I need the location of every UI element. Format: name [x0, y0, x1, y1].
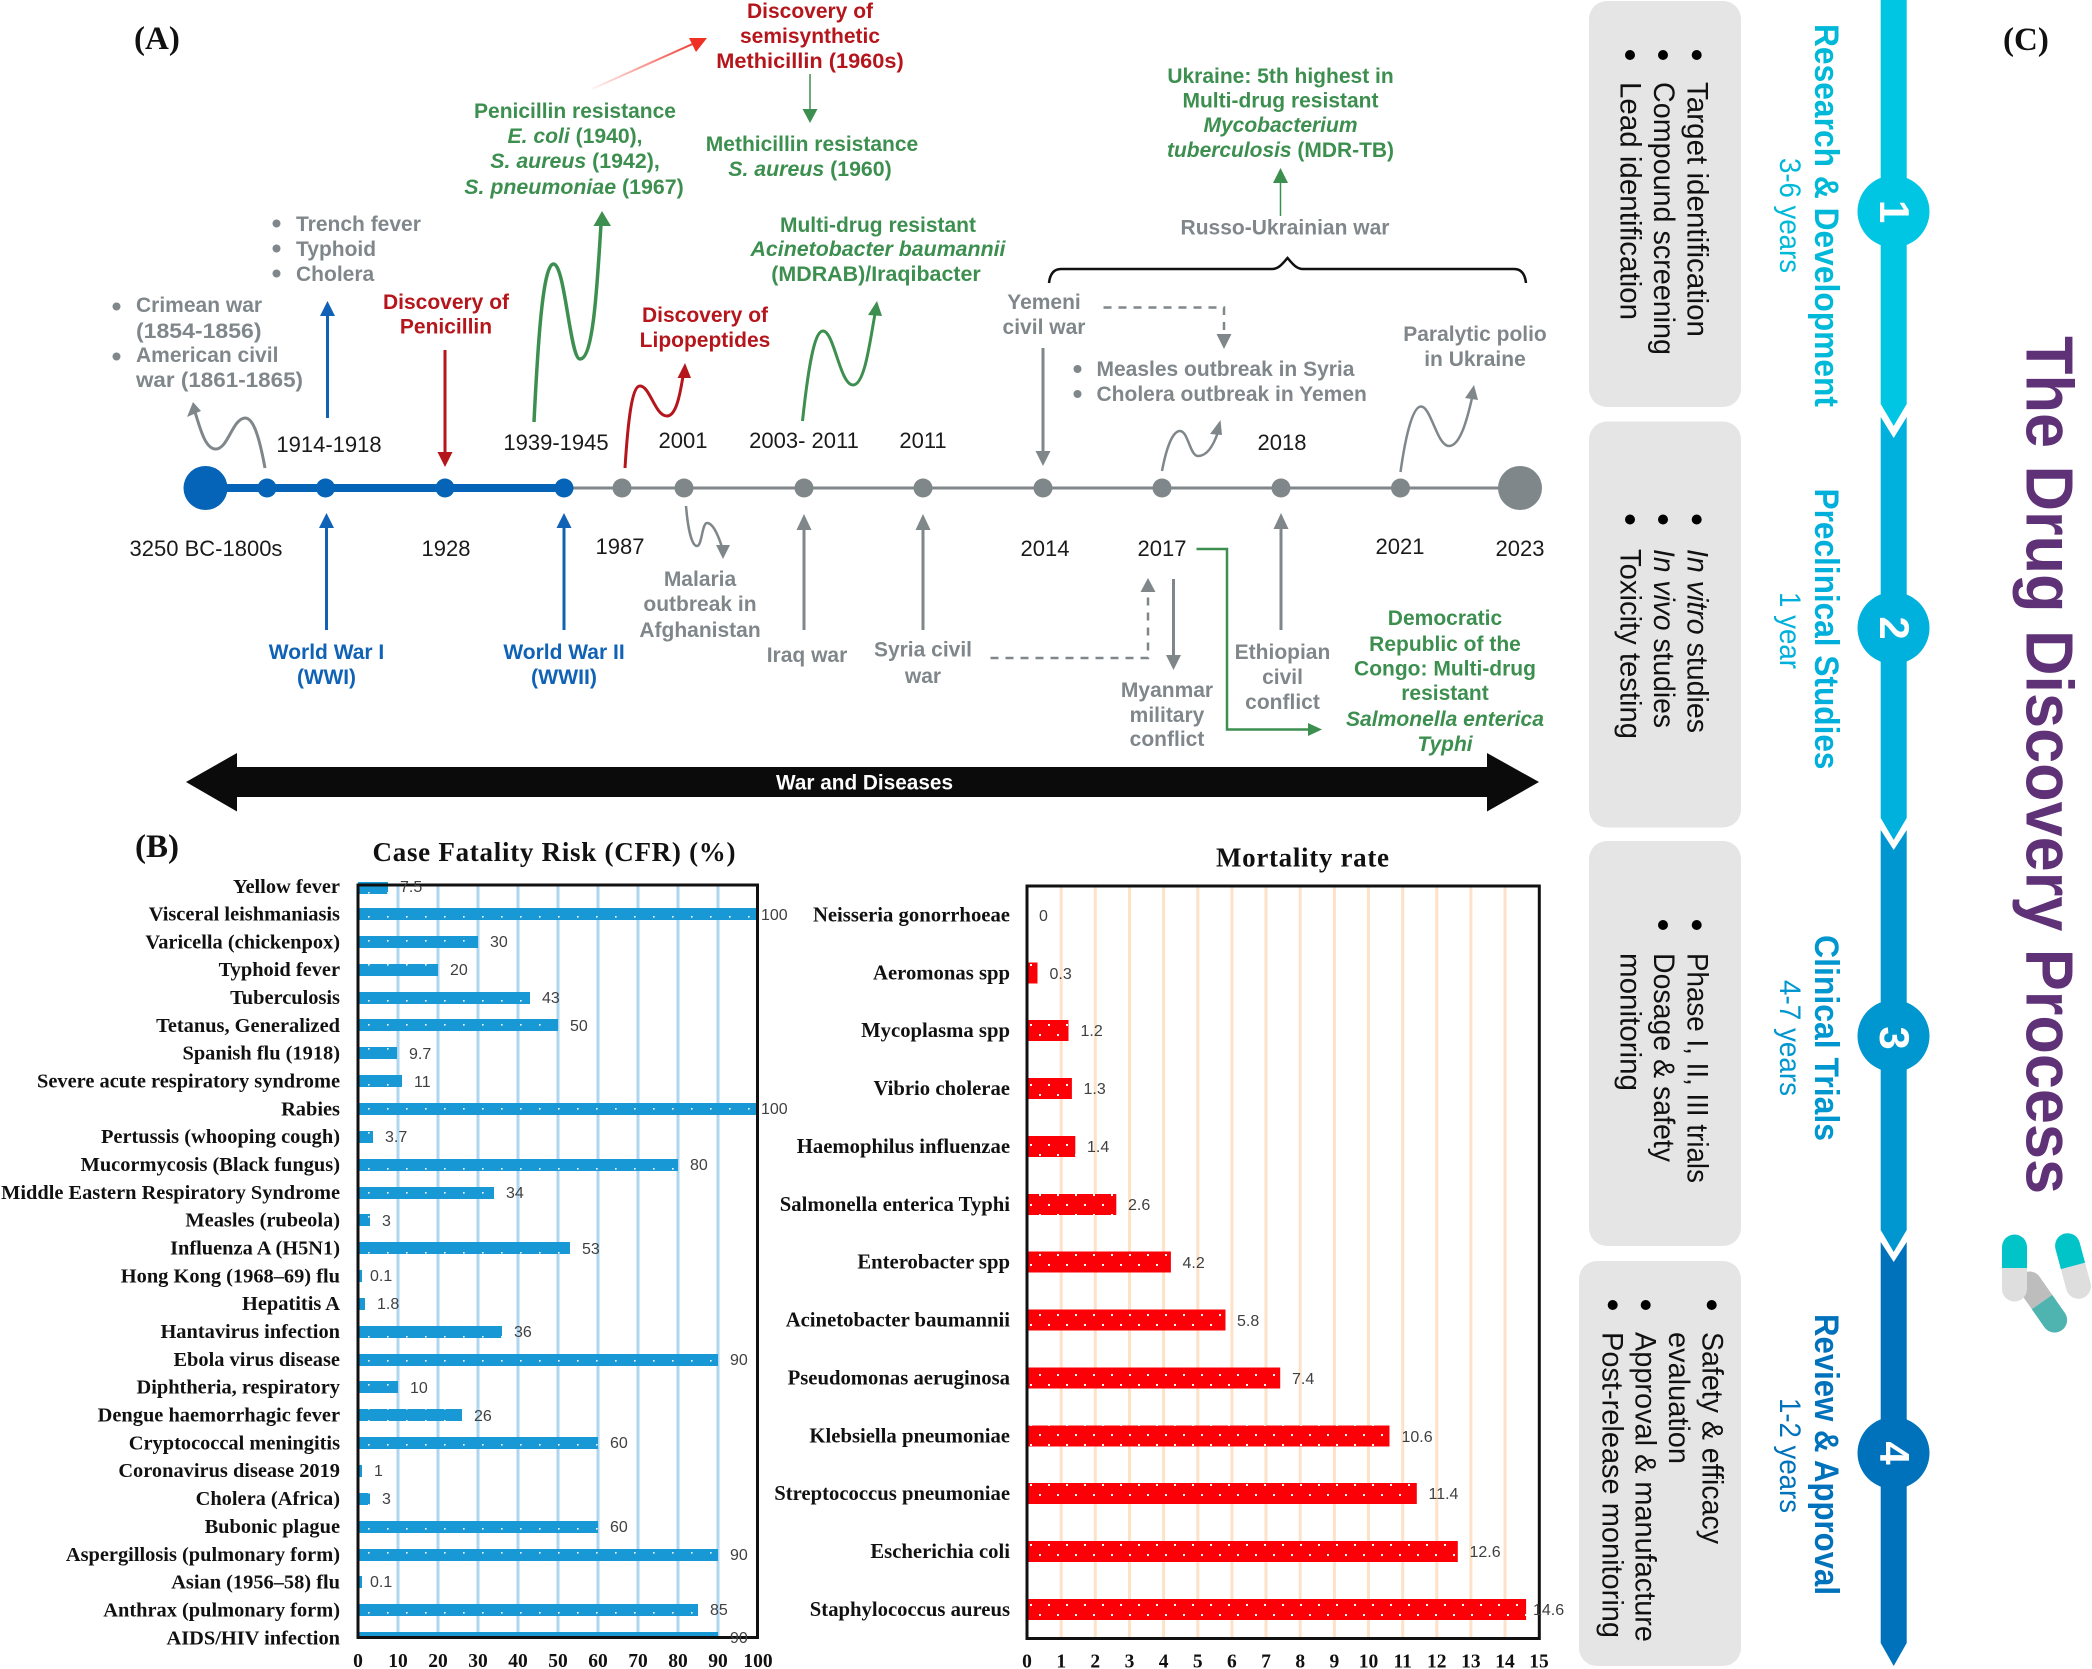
panel A: war and diseases timeline — [112, 0, 1547, 812]
MDRAB text: Multi-drug resistant — [780, 214, 976, 237]
Myanmar military conflict: Myanmar — [1121, 679, 1213, 702]
Measles and cholera outbreak text: Measles outbreak in Syria — [1096, 358, 1355, 381]
bar chart: Case Fatality Risk: Ebola virus disease — [173, 1349, 340, 1371]
Syria civil war: Syria civil — [874, 638, 972, 661]
card: step 3 activities: monitoring — [1614, 953, 1646, 1091]
card: step 3 activities — [1589, 841, 1741, 1246]
bar chart: Case Fatality Risk: Diphtheria, respiratory — [136, 1376, 340, 1398]
Yemeni civil war: Yemeni — [1007, 291, 1081, 314]
Discovery of semisynthetic Methicillin — [716, 0, 904, 73]
arrow: down from Yemeni war — [1036, 348, 1050, 466]
bar chart: Case Fatality Risk: 100 — [761, 907, 788, 924]
step 2 heading — [1773, 488, 1845, 770]
Myanmar military conflict: conflict — [1130, 728, 1204, 751]
bar chart: Mortality rate: Haemophilus influenzae — [797, 1136, 1010, 1158]
bar chart: Case Fatality Risk: Influenza A (H5N1) — [170, 1238, 340, 1260]
step 3 heading: Clinical Trials — [1807, 935, 1845, 1141]
Yemeni civil war: civil war — [1003, 316, 1085, 339]
World War I — [269, 641, 384, 689]
bar chart: Case Fatality Risk: 80 — [690, 1157, 708, 1174]
timeline years: 2003- 2011 — [749, 428, 859, 453]
step 4 heading: Review & Approval — [1807, 1314, 1845, 1595]
arrow: up from Syria civil war — [916, 514, 930, 630]
timeline years: 2017 — [1138, 536, 1186, 561]
Ukraine MDR-TB text: Mycobacterium — [1203, 114, 1358, 137]
bar chart: Case Fatality Risk: 9.7 — [409, 1046, 431, 1063]
bar chart: Mortality rate — [774, 842, 1564, 1669]
bar chart: Case Fatality Risk: Varicella (chickenpox) — [145, 932, 340, 954]
step 4 spine and badge — [1858, 1242, 1930, 1666]
timeline years: 2018 — [1258, 430, 1306, 455]
arrow: up from Iraq war — [796, 514, 812, 630]
arrow: up from WWI — [319, 513, 334, 630]
timeline years: 2021 — [1376, 534, 1424, 559]
Crimean and American civil war text: war (1861-1865) — [135, 369, 303, 392]
dashed arrow: Syria to Myanmar year — [990, 578, 1156, 658]
arrow: up to WWI diseases — [320, 301, 335, 418]
timeline years: 1914-1918 — [276, 432, 382, 457]
bar chart: Case Fatality Risk: Tuberculosis — [230, 987, 340, 1009]
Penicillin resistance text: Penicillin resistance — [474, 100, 676, 123]
bar chart: Case Fatality Risk: Bubonic plague — [205, 1516, 340, 1538]
bar chart: Mortality rate: 14.6 — [1533, 1602, 1564, 1619]
arrow: wavy to outbreaks — [1162, 420, 1222, 471]
bar chart: Case Fatality Risk: Typhoid fever — [219, 959, 340, 981]
card: step 4 activities: evaluation — [1662, 1332, 1695, 1464]
DRC Salmonella text: resistant — [1401, 682, 1489, 705]
bar chart: Case Fatality Risk: Visceral leishmaniasis — [149, 904, 340, 926]
bar chart: Case Fatality Risk: 3.7 — [385, 1129, 407, 1146]
arrow: wavy to malaria — [686, 506, 730, 559]
bar chart: Case Fatality Risk: 43 — [542, 990, 560, 1007]
Paralytic polio in Ukraine: in Ukraine — [1424, 348, 1526, 371]
bar chart: Mortality rate: 10.6 — [1402, 1429, 1433, 1446]
bar chart: Case Fatality Risk: 50 — [570, 1018, 588, 1035]
bar chart: Case Fatality Risk: 90 — [730, 1352, 748, 1369]
bar chart: Mortality rate: 7.4 — [1292, 1371, 1314, 1388]
DRC Salmonella text: Democratic — [1388, 607, 1503, 630]
Crimean and American civil war text — [112, 294, 303, 392]
bar chart: Case Fatality Risk: 85 — [710, 1602, 728, 1619]
Ethiopian civil conflict: Ethiopian — [1235, 641, 1330, 664]
Penicillin resistance text: S. pneumoniae (1967) — [464, 176, 684, 199]
Malaria outbreak: Afghanistan — [639, 619, 761, 642]
bar chart: Case Fatality Risk: 10 — [410, 1380, 428, 1397]
arrow: wavy to penicillin resistance — [534, 211, 611, 422]
banner: double arrow War and Diseases: War and Diseases — [776, 770, 953, 794]
timeline years: 2011 — [899, 428, 947, 453]
timeline axis — [184, 466, 1542, 510]
bar chart: Mortality rate: 2.6 — [1128, 1197, 1150, 1214]
icon: pills — [2002, 1230, 2092, 1337]
card: step 3 activities: Phase I, II, III trials — [1680, 953, 1714, 1183]
Methicillin resistance text: S. aureus (1960) — [728, 158, 892, 181]
chart title: CFR: Case Fatality Risk (CFR) (%) — [372, 837, 736, 867]
step 2 spine and badge: 2 — [1871, 616, 1918, 640]
World War I: World War I — [269, 641, 384, 664]
bar chart: Case Fatality Risk: 1.8 — [377, 1296, 399, 1313]
bar chart: Case Fatality Risk: Rabies — [281, 1098, 340, 1120]
bar chart: Mortality rate: 1.3 — [1084, 1081, 1106, 1098]
bar chart: Case Fatality Risk: Tetanus, Generalized — [156, 1015, 341, 1037]
bar chart: Case Fatality Risk: Coronavirus disease 2019 — [118, 1460, 340, 1482]
arrow: up from WWII — [556, 513, 572, 630]
step 4 heading: 1-2 years — [1773, 1398, 1806, 1513]
bar chart: Case Fatality Risk: 1 — [374, 1463, 383, 1480]
MDRAB text: (MDRAB)/Iraqibacter — [771, 263, 981, 286]
Discovery of Penicillin: Penicillin — [400, 315, 492, 338]
timeline years: 1939-1945 — [503, 430, 609, 455]
bar chart: Case Fatality Risk — [1, 837, 788, 1669]
step 3 heading: 4-7 years — [1773, 980, 1806, 1096]
step 1 heading: 3-6 years — [1773, 158, 1806, 273]
arrow: wavy to lipopeptides — [625, 363, 691, 468]
DRC Salmonella text: Republic of the — [1369, 633, 1521, 656]
Methicillin resistance text — [706, 133, 918, 181]
arrow: faded red to semisynthetic methicillin — [592, 38, 707, 89]
Discovery of Lipopeptides: Discovery of — [642, 304, 768, 327]
bar chart: Case Fatality Risk: Asian (1956–58) flu — [171, 1572, 340, 1594]
bar chart: Case Fatality Risk: Measles (rubeola) — [185, 1210, 340, 1232]
elbow arrow to Salmonella Typhi — [1196, 549, 1322, 736]
Russo-Ukrainian war brace — [1049, 258, 1526, 283]
bar chart: Case Fatality Risk: 3 — [382, 1213, 391, 1230]
bar chart: Case Fatality Risk: 100 — [761, 1101, 788, 1118]
panel label A: (A) — [134, 21, 180, 57]
bar chart: Mortality rate: Staphylococcus aureus — [810, 1599, 1010, 1621]
card: step 4 activities: Post-release monitoring — [1596, 1332, 1628, 1638]
panel label B: (B) — [135, 829, 179, 865]
timeline years: 1928 — [422, 536, 470, 561]
card: step 1 activities: Compound screening — [1647, 82, 1680, 355]
Discovery of semisynthetic Methicillin: Discovery of — [747, 0, 874, 23]
banner: double arrow War and Diseases — [186, 753, 1539, 812]
Measles and cholera outbreak text — [1074, 358, 1367, 406]
Ukraine MDR-TB text: Multi-drug resistant — [1182, 89, 1379, 112]
Methicillin resistance text: Methicillin resistance — [706, 133, 918, 156]
bar chart: Case Fatality Risk: 36 — [514, 1324, 532, 1341]
bar chart: Case Fatality Risk: 60 — [610, 1519, 628, 1536]
MDRAB text — [749, 214, 1007, 286]
bar chart: Mortality rate: Escherichia coli — [870, 1541, 1010, 1563]
Ethiopian civil conflict: conflict — [1245, 691, 1320, 714]
step 2 heading: 1 year — [1773, 592, 1806, 669]
arrow: down to methicillin resistance — [802, 74, 818, 123]
bar chart: Case Fatality Risk: 53 — [582, 1241, 600, 1258]
bar chart: Case Fatality Risk: Cryptococcal meningitis — [129, 1432, 340, 1454]
bar chart: Mortality rate: Streptococcus pneumoniae — [774, 1483, 1010, 1505]
timeline years — [130, 428, 1544, 561]
timeline years: 2014 — [1021, 536, 1069, 561]
bar chart: Case Fatality Risk: Anthrax (pulmonary form) — [103, 1600, 340, 1622]
bar chart: Mortality rate: 5.8 — [1237, 1313, 1259, 1330]
Crimean and American civil war text: American civil — [136, 344, 278, 367]
card: step 2 activities: In vivo studies — [1647, 549, 1680, 728]
card: step 1 activities: Target identification — [1680, 82, 1714, 337]
Ukraine MDR-TB text: Ukraine: 5th highest in — [1167, 65, 1394, 88]
card: step 2 activities: In vitro studies — [1680, 549, 1714, 733]
step 3 spine and badge — [1858, 830, 1930, 1252]
Discovery of semisynthetic Methicillin: Methicillin (1960s) — [716, 50, 904, 73]
bar chart: Case Fatality Risk: 7.5 — [400, 879, 422, 896]
DRC Salmonella text: Salmonella enterica — [1346, 708, 1544, 731]
World War II: World War II — [503, 641, 625, 664]
DRC Salmonella text: Congo: Multi-drug — [1354, 657, 1536, 680]
Discovery of semisynthetic Methicillin: semisynthetic — [740, 25, 880, 48]
step 4 spine and badge: 4 — [1871, 1441, 1918, 1465]
step 1 heading: Research & Development — [1807, 24, 1845, 407]
WWI diseases text: Typhoid — [296, 238, 376, 261]
Malaria outbreak: Malaria — [664, 568, 736, 591]
step 1 spine and badge: 1 — [1871, 200, 1918, 223]
arrow: wavy to MDRAB — [802, 301, 882, 421]
World War I: (WWI) — [297, 666, 356, 689]
arrow: down to Myanmar — [1166, 579, 1181, 670]
bar chart: Case Fatality Risk: 20 — [450, 962, 468, 979]
panel B: charts — [1, 829, 1564, 1669]
bar chart: Case Fatality Risk: Mucormycosis (Black fungus) — [81, 1154, 340, 1176]
bar chart: Case Fatality Risk: Hong Kong (1968–69) flu — [121, 1266, 340, 1288]
timeline years: 2023 — [1496, 536, 1544, 561]
vertical title: The Drug Discovery Process — [2012, 336, 2086, 1194]
chart title: Mortality rate: Mortality rate — [1216, 842, 1389, 872]
step 1 spine and badge — [1858, 0, 1930, 426]
step 3 spine and badge: 3 — [1871, 1026, 1918, 1050]
bar chart: Case Fatality Risk: Spanish flu (1918) — [182, 1042, 340, 1064]
process spine — [1858, 0, 1930, 1666]
panel label C: (C) — [2003, 22, 2049, 58]
Crimean and American civil war text: (1854-1856) — [136, 320, 262, 343]
bar chart: Case Fatality Risk: Hepatitis A — [242, 1293, 340, 1315]
step 3 heading — [1773, 935, 1845, 1141]
bar chart: Mortality rate: Klebsiella pneumoniae — [809, 1426, 1010, 1448]
step 4 heading — [1773, 1314, 1845, 1595]
Iraq war: Iraq war — [767, 644, 847, 667]
timeline years: 3250 BC-1800s — [130, 536, 282, 561]
Malaria outbreak: outbreak in — [643, 593, 757, 616]
bar chart: Case Fatality Risk: Pertussis (whooping cough) — [101, 1126, 340, 1148]
dashed arrow: Yemen to outbreaks — [1104, 308, 1232, 349]
bar chart: Case Fatality Risk: Severe acute respiratory syndrome — [37, 1070, 340, 1092]
timeline years: 2001 — [659, 428, 707, 453]
bar chart: Mortality rate: 0 — [1039, 908, 1048, 925]
bar chart: Mortality rate: 12.6 — [1470, 1544, 1501, 1561]
bar chart: Case Fatality Risk: 90 — [730, 1547, 748, 1564]
DRC Salmonella text: Typhi — [1417, 733, 1474, 756]
bar chart: Mortality rate: Enterobacter spp — [857, 1252, 1010, 1274]
arrow: penicillin down — [438, 350, 452, 467]
bar chart: Mortality rate: Vibrio cholerae — [873, 1078, 1010, 1100]
step 2 heading: Preclinical Studies — [1807, 488, 1845, 770]
bar chart: Mortality rate: Acinetobacter baumannii — [786, 1310, 1010, 1332]
Penicillin resistance text: E. coli (1940), — [508, 125, 642, 148]
bar chart: Case Fatality Risk: Cholera (Africa) — [196, 1488, 340, 1510]
WWI diseases text: Cholera — [296, 263, 375, 286]
bar chart: Case Fatality Risk: 30 — [490, 934, 508, 951]
Russo-Ukrainian war: Russo-Ukrainian war — [1181, 216, 1389, 239]
bar chart: Mortality rate: 0.3 — [1050, 966, 1072, 983]
Discovery of Lipopeptides: Lipopeptides — [640, 329, 770, 352]
bar chart: Case Fatality Risk: Dengue haemorrhagic fever — [98, 1404, 340, 1426]
Measles and cholera outbreak text: Cholera outbreak in Yemen — [1096, 383, 1367, 406]
MDRAB text: Acinetobacter baumannii — [749, 238, 1007, 261]
DRC Salmonella text — [1346, 607, 1544, 756]
Myanmar military conflict: military — [1130, 704, 1205, 727]
bar chart: Mortality rate: Pseudomonas aeruginosa — [788, 1368, 1011, 1390]
card: step 3 activities: Dosage & safety — [1647, 953, 1680, 1162]
Crimean and American civil war text: Crimean war — [136, 294, 262, 317]
Syria civil war: war — [904, 665, 941, 688]
bar chart: Case Fatality Risk: Yellow fever — [233, 876, 340, 898]
step 1 heading — [1773, 24, 1845, 407]
card: step 1 activities: Lead identification — [1614, 82, 1646, 320]
arrow: wavy to paralytic polio — [1400, 385, 1478, 472]
arrow: up to Ukraine MDR-TB — [1273, 168, 1288, 216]
bar chart: Case Fatality Risk: 26 — [474, 1408, 492, 1425]
step 2 spine and badge — [1858, 417, 1930, 840]
bar chart: Mortality rate: 11.4 — [1428, 1486, 1459, 1503]
card: step 4 activities: Safety & efficacy — [1696, 1332, 1728, 1544]
bar chart: Case Fatality Risk: 0.1 — [370, 1268, 392, 1285]
bar chart: Case Fatality Risk: 34 — [506, 1185, 524, 1202]
Penicillin resistance text — [464, 100, 684, 199]
bar chart: Mortality rate: 1.2 — [1080, 1023, 1103, 1040]
card: step 4 activities — [1579, 1261, 1741, 1666]
bar chart: Mortality rate: 4.2 — [1182, 1255, 1205, 1272]
Paralytic polio in Ukraine: Paralytic polio — [1403, 323, 1547, 346]
bar chart: Mortality rate: Salmonella enterica Typhi — [780, 1194, 1010, 1216]
Ethiopian civil conflict: civil — [1262, 666, 1303, 689]
card: step 4 activities: Approval & manufacture — [1628, 1332, 1662, 1642]
bar chart: Case Fatality Risk: 90 — [730, 1630, 748, 1647]
card: step 2 activities: Toxicity testing — [1614, 549, 1646, 739]
World War II — [503, 641, 625, 689]
bar chart: Mortality rate: 1.4 — [1087, 1139, 1109, 1156]
Penicillin resistance text: S. aureus (1942), — [490, 150, 660, 173]
WWI diseases text: Trench fever — [296, 213, 421, 236]
Ukraine MDR-TB text: tuberculosis (MDR-TB) — [1167, 139, 1394, 162]
card: step 1 activities — [1589, 1, 1741, 407]
bar chart: Case Fatality Risk: 3 — [382, 1491, 391, 1508]
bar chart: Case Fatality Risk: Middle Eastern Respiratory Syndrome — [1, 1182, 340, 1204]
bar chart: Case Fatality Risk: AIDS/HIV infection — [166, 1628, 341, 1650]
card: step 2 activities — [1589, 422, 1741, 828]
arrow: up from Ethiopian conflict — [1274, 513, 1288, 630]
bar chart: Case Fatality Risk: Hantavirus infection — [160, 1321, 341, 1343]
bar chart: Mortality rate: Aeromonas spp — [873, 962, 1010, 984]
bar chart: Case Fatality Risk: 11 — [414, 1074, 431, 1091]
Ukraine MDR-TB text — [1167, 65, 1394, 162]
arrow: wavy to Crimean war — [187, 402, 265, 468]
bar chart: Case Fatality Risk: 0.1 — [370, 1574, 392, 1591]
bar chart: Case Fatality Risk: 60 — [610, 1435, 628, 1452]
Discovery of Penicillin: Discovery of — [383, 291, 509, 314]
bar chart: Case Fatality Risk: Aspergillosis (pulmonary form) — [66, 1544, 340, 1566]
World War II: (WWII) — [531, 666, 597, 689]
WWI diseases text — [272, 213, 421, 286]
timeline years: 1987 — [596, 534, 644, 559]
bar chart: Mortality rate: Neisseria gonorrhoeae — [813, 904, 1010, 926]
bar chart: Mortality rate: Mycoplasma spp — [861, 1020, 1010, 1042]
panel C: drug discovery process — [1579, 0, 2092, 1666]
